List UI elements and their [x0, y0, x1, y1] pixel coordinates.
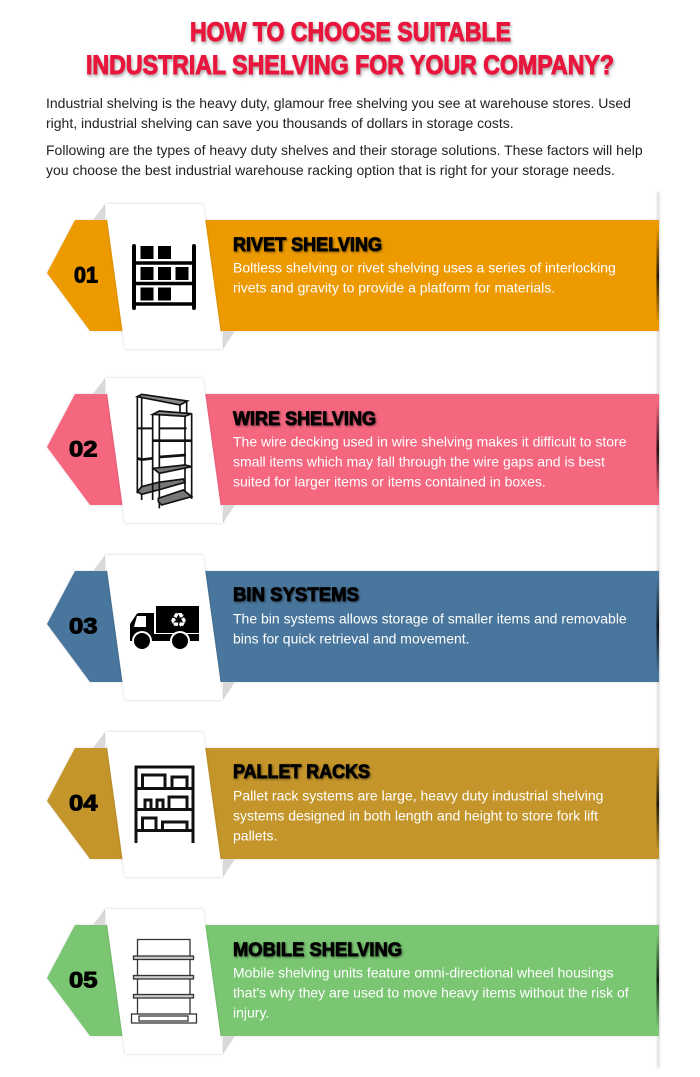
description: pallet racks — [233, 788, 603, 844]
title: INDUSTRIAL SHELVING FOR YOUR COMPANY? — [86, 50, 614, 80]
description: rivet shelving: Boltless shelving or rivet shelving uses a series of interlocking — [233, 260, 616, 276]
icon: recycling truck — [130, 606, 199, 651]
panel: wire shelving — [47, 378, 659, 523]
heading: bin systems: BIN SYSTEMS — [233, 584, 359, 606]
description: wire shelving: The wire decking used in wire shelving makes it difficult to store — [233, 434, 627, 450]
description: mobile shelving — [233, 964, 629, 1020]
right edge shadow — [657, 192, 660, 1068]
banner: pallet racks — [47, 748, 659, 859]
description: mobile shelving: injury. — [233, 1004, 269, 1020]
description: bin systems: bins for quick retrieval and movement. — [233, 630, 470, 646]
icon: wire shelf — [137, 394, 192, 508]
description: pallet racks: pallets. — [233, 828, 277, 844]
intro text: right, industrial shelving can save you thousands of dollars in storage costs. — [46, 115, 514, 131]
icon: recycling truck: ♻ — [170, 608, 187, 632]
title: HOW TO CHOOSE SUITABLE — [190, 17, 511, 47]
banner: wire shelving — [47, 394, 659, 505]
card: pallet racks — [105, 732, 223, 877]
heading: mobile shelving: MOBILE SHELVING — [233, 939, 402, 961]
description: wire shelving — [233, 434, 627, 490]
icon: rivet shelf — [134, 246, 194, 308]
panel: mobile shelving — [47, 909, 659, 1054]
description: pallet racks: Pallet rack systems are large, heavy duty industrial shelving — [233, 788, 603, 804]
number 05: 05 — [69, 968, 98, 992]
icon: mobile shelf — [132, 940, 196, 1023]
title — [86, 17, 614, 80]
description: bin systems — [233, 610, 627, 646]
intro text: you choose the best industrial warehouse racking option that is right for your storage needs. — [46, 162, 615, 178]
intro text: Industrial shelving is the heavy duty, glamour free shelving you see at warehouse stores. Used — [46, 95, 631, 111]
panel: rivet shelving — [47, 204, 659, 349]
intro text: Following are the types of heavy duty shelves and their storage solutions. These factors will help — [46, 142, 643, 158]
description: bin systems: The bin systems allows storage of smaller items and removable — [233, 610, 627, 626]
heading: rivet shelving: RIVET SHELVING — [233, 234, 382, 256]
panel: bin systems — [47, 555, 659, 700]
description: pallet racks: systems designed in both length and height to store fork lift — [233, 808, 598, 824]
card: wire shelving — [105, 378, 223, 523]
banner: rivet shelving — [47, 220, 659, 331]
description: mobile shelving: that's why they are used to move heavy items without the risk of — [233, 984, 629, 1000]
description: mobile shelving: Mobile shelving units feature omni-directional wheel housings — [233, 964, 614, 980]
description: wire shelving: small items which may fall through the wire gaps and is best — [233, 454, 605, 470]
number 01: 01 — [74, 262, 98, 288]
panel: pallet racks — [47, 732, 659, 877]
banner: mobile shelving — [47, 925, 659, 1036]
description: wire shelving: suited for larger items or items contained in boxes. — [233, 474, 546, 490]
intro text — [46, 95, 643, 178]
card: rivet shelving — [105, 204, 223, 349]
icon: pallet rack — [136, 767, 193, 843]
banner: bin systems — [47, 571, 659, 682]
number 03: 03 — [69, 614, 98, 638]
description: rivet shelving — [233, 260, 616, 296]
number 04: 04 — [69, 790, 98, 816]
heading: wire shelving: WIRE SHELVING — [233, 408, 376, 430]
description: rivet shelving: rivets and gravity to provide a platform for materials. — [233, 280, 555, 296]
heading: pallet racks: PALLET RACKS — [233, 761, 370, 783]
number 02: 02 — [69, 436, 98, 462]
card: mobile shelving — [105, 909, 223, 1054]
card: bin systems — [105, 555, 223, 700]
